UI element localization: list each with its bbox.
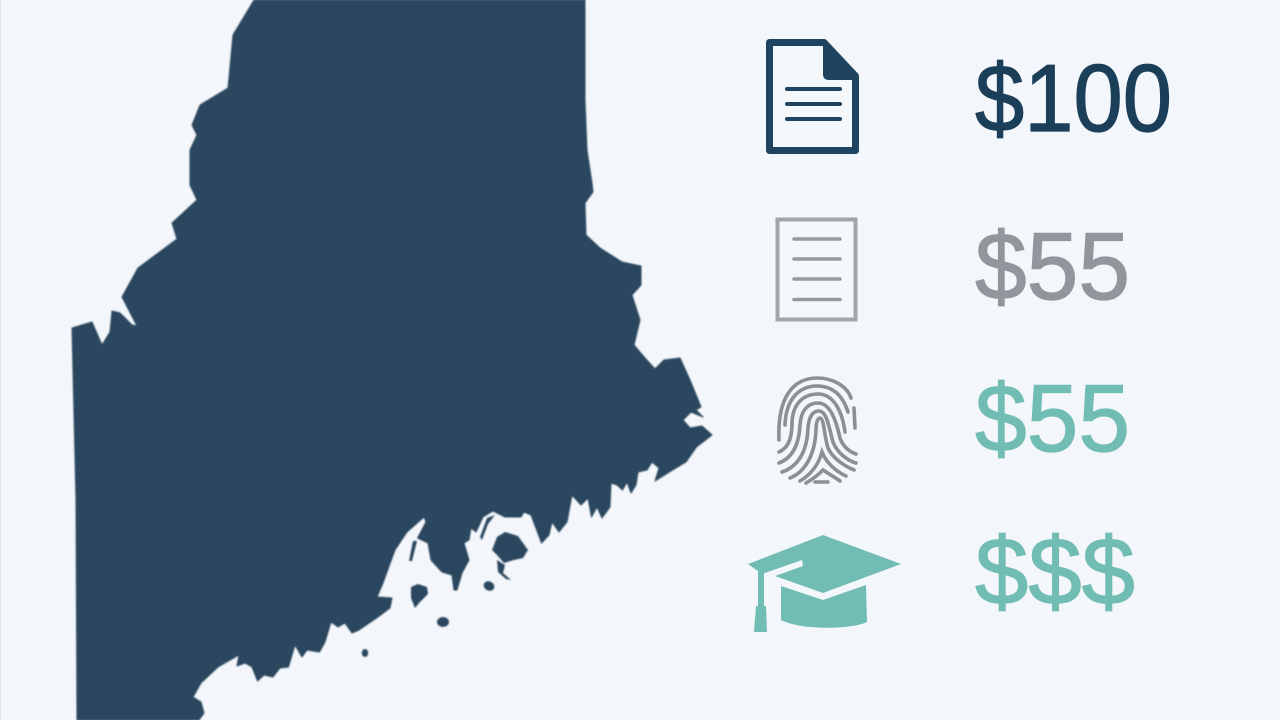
icon: document with folded corner	[770, 40, 859, 150]
map: silhouette of Maine	[72, 0, 712, 720]
icon: graduation cap	[748, 535, 901, 632]
price: $100: $100	[975, 45, 1172, 152]
price: $55 (teal): $55	[975, 365, 1130, 472]
coastal islands	[362, 515, 528, 657]
icon: fingerprint	[779, 378, 856, 483]
icon: plain document	[778, 220, 856, 320]
price: $$$: $$$	[975, 518, 1135, 625]
price: $55 (gray): $55	[975, 213, 1130, 320]
